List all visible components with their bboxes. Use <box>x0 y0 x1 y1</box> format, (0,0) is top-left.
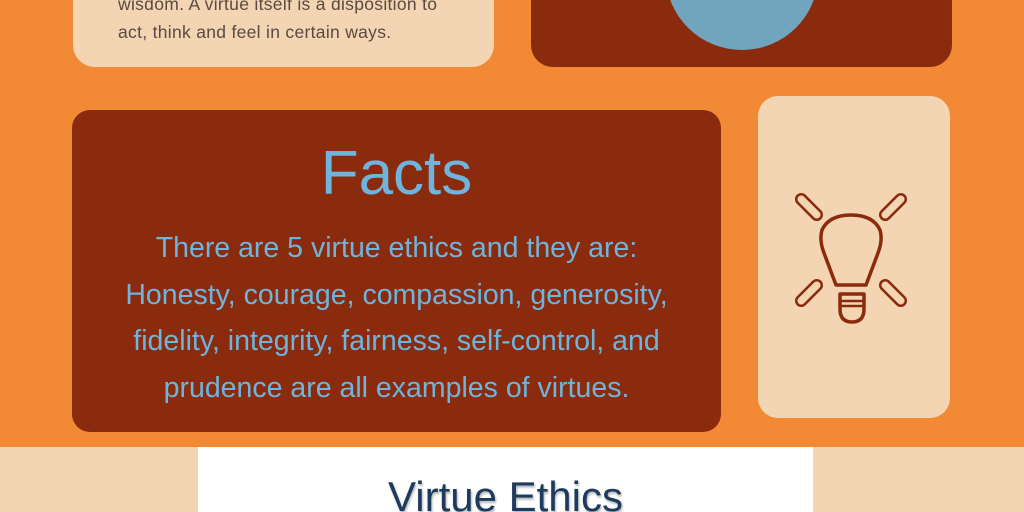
heading: Facts: Facts <box>321 139 472 208</box>
panel: bottom band <box>0 447 1024 512</box>
text: facts body <box>125 232 668 404</box>
panel: facts <box>72 110 721 432</box>
text: definition: act, think and feel in certain ways. <box>118 22 391 42</box>
text: facts body: fidelity, integrity, fairness, self-control, and <box>133 325 660 357</box>
panel: lightbulb card <box>758 96 950 418</box>
icon: lightbulb <box>795 193 907 324</box>
text: facts body: prudence are all examples of virtues. <box>164 372 629 404</box>
text: facts body: There are 5 virtue ethics and they are: <box>156 232 637 264</box>
blue ellipse <box>666 0 818 50</box>
text: definition <box>118 0 437 42</box>
white title box <box>198 447 813 512</box>
panel: definition card <box>73 0 494 67</box>
panel: image card <box>531 0 952 67</box>
text: facts body: Honesty, courage, compassion, generosity, <box>125 278 668 310</box>
